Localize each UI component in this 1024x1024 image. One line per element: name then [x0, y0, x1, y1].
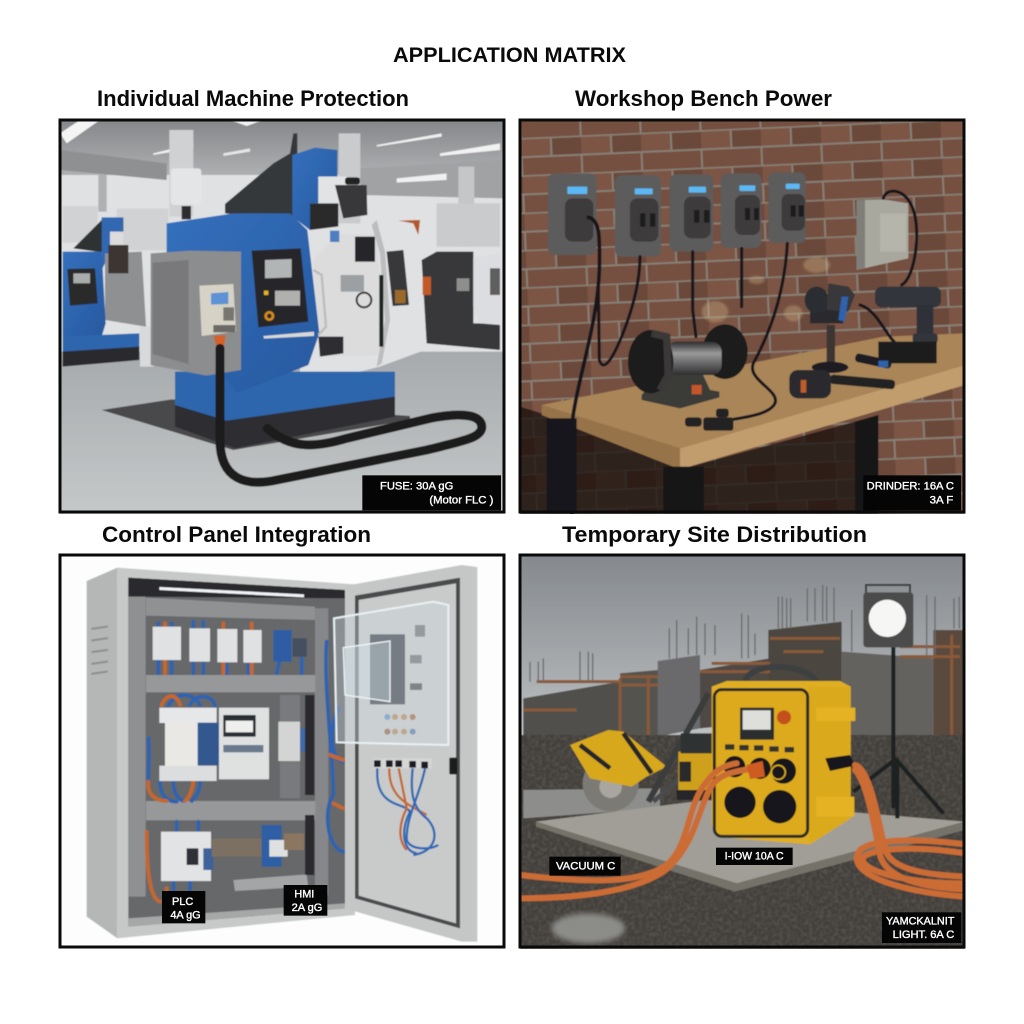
bench vise tool [805, 283, 855, 373]
cordless drill [854, 287, 941, 369]
PLC label [162, 891, 205, 923]
wiring inside cabinet [147, 622, 343, 902]
transparent acrylic cover [334, 602, 448, 745]
cabinet body [87, 568, 355, 938]
saw label: I-IOW 10A C [725, 851, 784, 863]
title: APPLICATION MATRIX [393, 44, 626, 67]
HMI label: HMI [294, 888, 314, 900]
floor [60, 352, 505, 514]
windows [63, 203, 500, 250]
bench grinder [628, 324, 748, 408]
red stop button [777, 710, 791, 724]
HMI label [284, 885, 327, 916]
panel: individual machine protection [60, 120, 505, 514]
orange site cables [520, 763, 965, 898]
open door [347, 565, 477, 942]
steel electrical cabinet [151, 251, 241, 376]
concrete slabs [523, 788, 965, 892]
round sockets [724, 756, 796, 823]
gravel ground [520, 735, 965, 949]
door latch [449, 758, 457, 774]
floodlight on tripod [853, 585, 943, 818]
grinder label: 3A F [930, 494, 954, 506]
puddle [552, 913, 625, 943]
concrete saw [570, 693, 708, 811]
HMI label: 2A gG [292, 902, 322, 914]
grinder label: DRINDER: 16A C [867, 480, 954, 492]
fuse label: FUSE: 30A gG [380, 480, 453, 492]
door components behind acrylic [370, 625, 425, 735]
fused isolator device [199, 284, 236, 347]
door connectors and cables [373, 758, 438, 855]
sparks [702, 257, 830, 322]
analog meter [740, 708, 774, 740]
heading: control panel integration: Control Panel Integration [102, 522, 371, 547]
white enclosure [300, 220, 420, 372]
panel: temporary site distribution [520, 555, 965, 949]
floor mat [102, 399, 410, 450]
DIN rails [146, 598, 315, 891]
panel: workshop bench power [520, 120, 965, 514]
machine base [175, 372, 395, 422]
fuse label: (Motor FLC ) [429, 494, 493, 506]
under-bench shadow [520, 407, 855, 514]
light label [882, 912, 961, 943]
fuse label [362, 475, 501, 510]
grinder label [863, 475, 961, 510]
heading: individual machine protection: Individual Machine Protection [97, 86, 409, 111]
vacuum label [549, 857, 621, 876]
black power cable [220, 348, 482, 482]
socket outlets row [548, 172, 806, 257]
light label: LIGHT. 6A C [893, 929, 955, 941]
angle grinder [789, 370, 895, 398]
saw label [716, 848, 793, 865]
carry handle [745, 667, 817, 683]
yellow power distribution box [712, 681, 855, 844]
PLC label: PLC [172, 896, 194, 908]
heading: workshop bench power: Workshop Bench Power [575, 86, 832, 111]
light label: YAMCKALNIT [886, 915, 955, 927]
panel: control panel integration [60, 555, 505, 949]
hand tool on bench [685, 409, 733, 431]
LED strip [159, 587, 304, 597]
distribution box [857, 199, 908, 270]
main blue housing [167, 213, 326, 393]
PLC label: 4A gG [170, 909, 201, 921]
vacuum label: VACUUM C [556, 860, 616, 872]
right background machine [422, 252, 500, 350]
construction site structures [523, 585, 963, 745]
cables from sockets [572, 191, 917, 514]
top row breakers [153, 627, 307, 663]
bottom row breakers [161, 815, 314, 881]
overcast sky [520, 555, 965, 755]
left background machine [63, 217, 153, 367]
machine column [225, 133, 367, 233]
middle row controller [159, 695, 314, 798]
vacuum unit [677, 733, 715, 800]
heading: temporary site distribution: Temporary Site Distribution [562, 522, 867, 547]
workbench [542, 333, 965, 514]
